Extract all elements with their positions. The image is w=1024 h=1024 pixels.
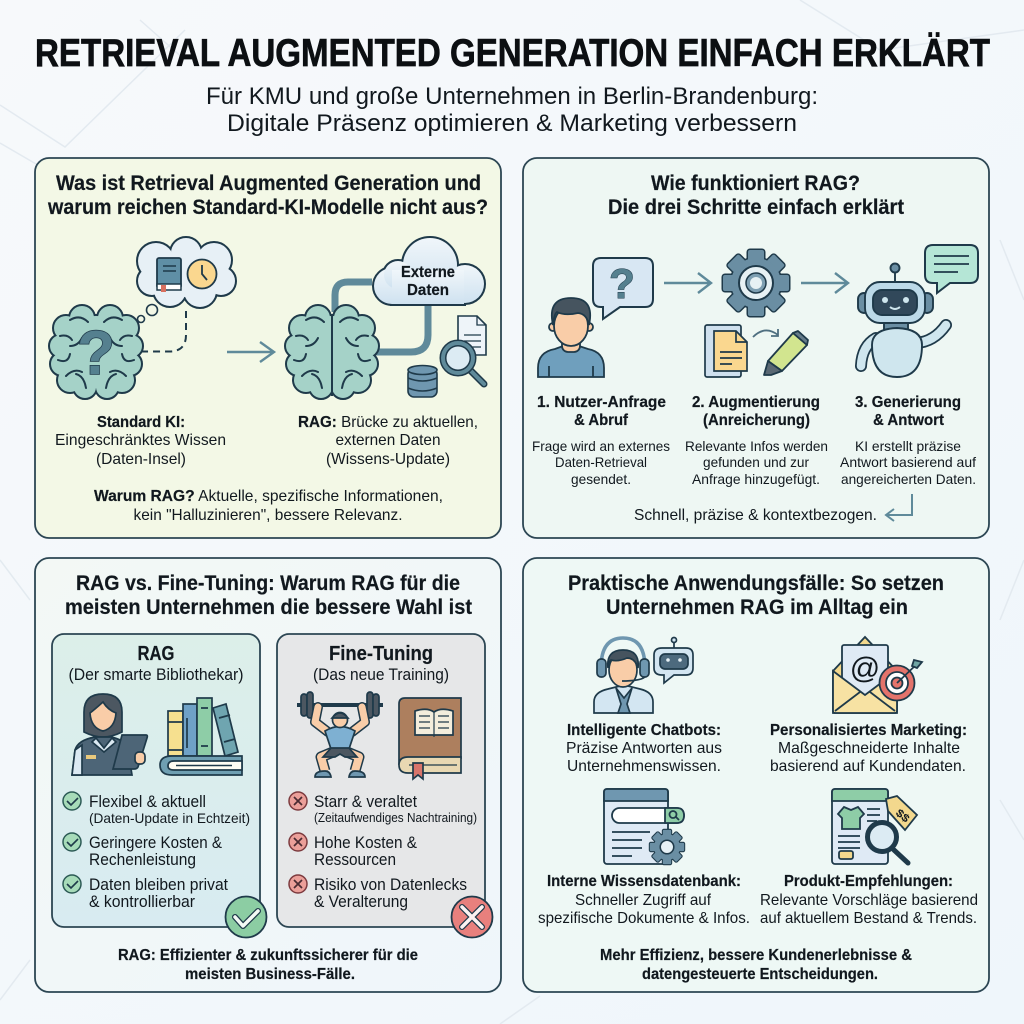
- label: marketing: Personalisiertes Marketing:: [770, 722, 967, 739]
- conclusion: RAG: Effizienter & zukunftssicherer für die: [118, 947, 418, 964]
- card heading: Fine-Tuning: [329, 643, 433, 665]
- card heading: (Das neue Training): [313, 665, 449, 684]
- icon: standard brain with question mark: ?: [77, 319, 115, 388]
- label: marketing: Maßgeschneiderte Inhalte: [778, 740, 960, 757]
- icon: cloud externe Daten: Externe: [401, 264, 455, 281]
- benefit list: Geringere Kosten &: [89, 834, 222, 852]
- label: marketing: basierend auf Kundendaten.: [770, 758, 966, 775]
- step 2: 2. Augmentierung: [692, 394, 820, 411]
- step 1: [532, 394, 670, 487]
- icon: answer bubble: [925, 245, 978, 293]
- step 2: [685, 394, 828, 487]
- conclusion: Mehr Effizienz, bessere Kundenerlebnisse &: [600, 947, 912, 964]
- label: product recommendations: auf aktuellem Bestand & Trends.: [760, 910, 977, 927]
- panel heading: Was ist Retrieval Augmented Generation und: [56, 172, 481, 195]
- icon: chatbot bubble: [654, 638, 693, 683]
- step 3: 3. Generierung: [855, 394, 961, 411]
- step 3: KI erstellt präzise: [855, 438, 961, 454]
- step 2: gefunden und zur: [703, 454, 809, 470]
- label: standard KI: (Daten-Insel): [96, 451, 186, 468]
- label: RAG bridge: externen Daten: [336, 432, 440, 449]
- conclusion: [118, 947, 418, 983]
- label: standard KI: Standard KI:: [97, 414, 185, 431]
- summary line: Schnell, präzise & kontextbezogen.: [634, 507, 877, 524]
- panel: wie funktioniert RAG: [523, 158, 989, 538]
- step 1: Daten-Retrieval: [555, 454, 647, 470]
- label: marketing: [770, 722, 967, 775]
- step 3: & Antwort: [873, 412, 945, 429]
- benefit list: Daten bleiben privat: [89, 876, 228, 894]
- icon: documents: [705, 325, 747, 377]
- panel heading: Die drei Schritte einfach erklärt: [608, 196, 904, 219]
- icon: envelope with target: @: [850, 652, 880, 685]
- panel heading: Unternehmen RAG im Alltag ein: [606, 596, 908, 619]
- icon: standard brain with question mark: [50, 306, 142, 398]
- panel heading: warum reichen Standard-KI-Modelle nicht aus?: [47, 196, 488, 219]
- icon: knowledge browser: [604, 789, 684, 864]
- card: Fine-Tuning: [277, 634, 492, 938]
- label: standard KI: Eingeschränktes Wissen: [55, 432, 226, 449]
- panel heading: [47, 172, 488, 219]
- why RAG note: [94, 488, 443, 524]
- icon: robot: [858, 264, 946, 377]
- conclusion: datengesteuerte Entscheidungen.: [642, 966, 878, 983]
- step 2: (Anreicherung): [703, 412, 810, 429]
- card: RAG: [52, 634, 266, 938]
- label: knowledge base: spezifische Dokumente & Infos.: [538, 910, 750, 927]
- card heading: (Der smarte Bibliothekar): [68, 665, 244, 684]
- why RAG note: kein "Halluzinieren", bessere Relevanz.: [134, 507, 402, 524]
- step 3: angereicherten Daten.: [841, 471, 976, 487]
- benefit list: Flexibel & aktuell: [89, 793, 206, 811]
- drawback list: Ressourcen: [314, 851, 396, 869]
- arrow: [227, 342, 274, 362]
- icon: magnifier: [443, 343, 484, 384]
- badge: cross: [452, 896, 492, 938]
- step 1: gesendet.: [571, 471, 631, 487]
- label: knowledge base: [538, 873, 750, 927]
- badge: check: [226, 896, 266, 938]
- label: product recommendations: Relevante Vorschläge basierend: [760, 892, 978, 909]
- benefit list: & kontrollierbar: [89, 893, 195, 911]
- panel heading: Wie funktioniert RAG?: [651, 172, 860, 195]
- icon: product page: [832, 789, 917, 864]
- icon: highlighter: [764, 331, 808, 375]
- icon: cloud externe Daten: [374, 238, 484, 304]
- label: chatbots: Präzise Antworten aus: [566, 740, 722, 757]
- step 3: Antwort basierend auf: [840, 454, 976, 470]
- icon: thought cloud with book and clock: [138, 238, 235, 322]
- icon: user: [538, 298, 604, 377]
- subtitle: [206, 83, 818, 137]
- conclusion: meisten Business-Fälle.: [185, 966, 355, 983]
- drawback list: Risiko von Datenlecks: [314, 876, 467, 894]
- icon: product page: $$: [893, 807, 912, 825]
- return arrow: [886, 494, 912, 521]
- conclusion: [600, 947, 912, 983]
- icon: librarian: [72, 694, 147, 775]
- icon: envelope with target: [833, 637, 922, 713]
- icon: RAG brain: [286, 306, 378, 398]
- subtitle: Für KMU und große Unternehmen in Berlin-Brandenburg:: [206, 83, 818, 110]
- step 2: Anfrage hinzugefügt.: [692, 471, 820, 487]
- label: product recommendations: [760, 873, 978, 927]
- label: chatbots: Unternehmenswissen.: [567, 758, 721, 775]
- arrow: [664, 273, 711, 293]
- label: standard KI: [55, 414, 226, 468]
- icon: support agent: [594, 638, 653, 713]
- benefit list: (Daten-Update in Echtzeit): [89, 810, 250, 826]
- dashed connector: [142, 311, 186, 352]
- drawback list: (Zeitaufwendiges Nachtraining): [314, 811, 477, 825]
- panel: RAG vs Fine-Tuning: [35, 558, 501, 992]
- label: knowledge base: Interne Wissensdatenbank:: [547, 873, 741, 890]
- label: RAG bridge: [298, 414, 478, 468]
- why RAG note: Warum RAG? Aktuelle, spezifische Informationen,: [94, 488, 443, 505]
- label: RAG bridge: (Wissens-Update): [326, 451, 450, 468]
- label: knowledge base: Schneller Zugriff auf: [575, 892, 712, 909]
- panel heading: RAG vs. Fine-Tuning: Warum RAG für die: [76, 572, 460, 595]
- step 1: 1. Nutzer-Anfrage: [537, 394, 666, 411]
- connection pipes: [335, 282, 428, 352]
- arrow: [801, 273, 848, 293]
- card heading: [313, 643, 449, 684]
- panel heading: Praktische Anwendungsfälle: So setzen: [568, 572, 944, 595]
- step 1: & Abruf: [574, 412, 629, 429]
- icon: document: [458, 316, 486, 355]
- icon: question bubble: ?: [609, 260, 635, 307]
- card heading: [68, 643, 244, 684]
- label: chatbots: [566, 722, 722, 775]
- label: RAG bridge: RAG: Brücke zu aktuellen,: [298, 414, 478, 431]
- panel heading: meisten Unternehmen die bessere Wahl ist: [65, 596, 472, 619]
- icon: training book: [399, 698, 461, 779]
- icon: weightlifter: [297, 692, 383, 777]
- icon: gear: [723, 250, 789, 316]
- step 2: Relevante Infos werden: [685, 438, 828, 454]
- icon: books: [160, 698, 242, 775]
- curved arrow: [753, 329, 778, 337]
- drawback list: Starr & veraltet: [314, 793, 417, 811]
- panel heading: [65, 572, 472, 619]
- card heading: RAG: [138, 643, 174, 665]
- step 3: [840, 394, 976, 487]
- step 1: Frage wird an externes: [532, 438, 670, 454]
- benefit list: [63, 792, 250, 911]
- icon: database: [408, 366, 437, 397]
- drawback list: Hohe Kosten &: [314, 834, 417, 852]
- benefit list: Rechenleistung: [89, 851, 196, 869]
- drawback list: [289, 792, 477, 911]
- label: chatbots: Intelligente Chatbots:: [567, 722, 721, 739]
- panel: Anwendungsfälle: [523, 558, 989, 992]
- panel heading: [608, 172, 904, 219]
- panel: was ist RAG: [35, 158, 501, 538]
- label: product recommendations: Produkt-Empfehlungen:: [784, 873, 953, 890]
- icon: cloud externe Daten: Daten: [407, 282, 449, 299]
- subtitle: Digitale Präsenz optimieren & Marketing verbessern: [227, 110, 797, 137]
- icon: question bubble: [593, 258, 653, 319]
- panel heading: [568, 572, 944, 619]
- drawback list: & Veralterung: [314, 893, 408, 911]
